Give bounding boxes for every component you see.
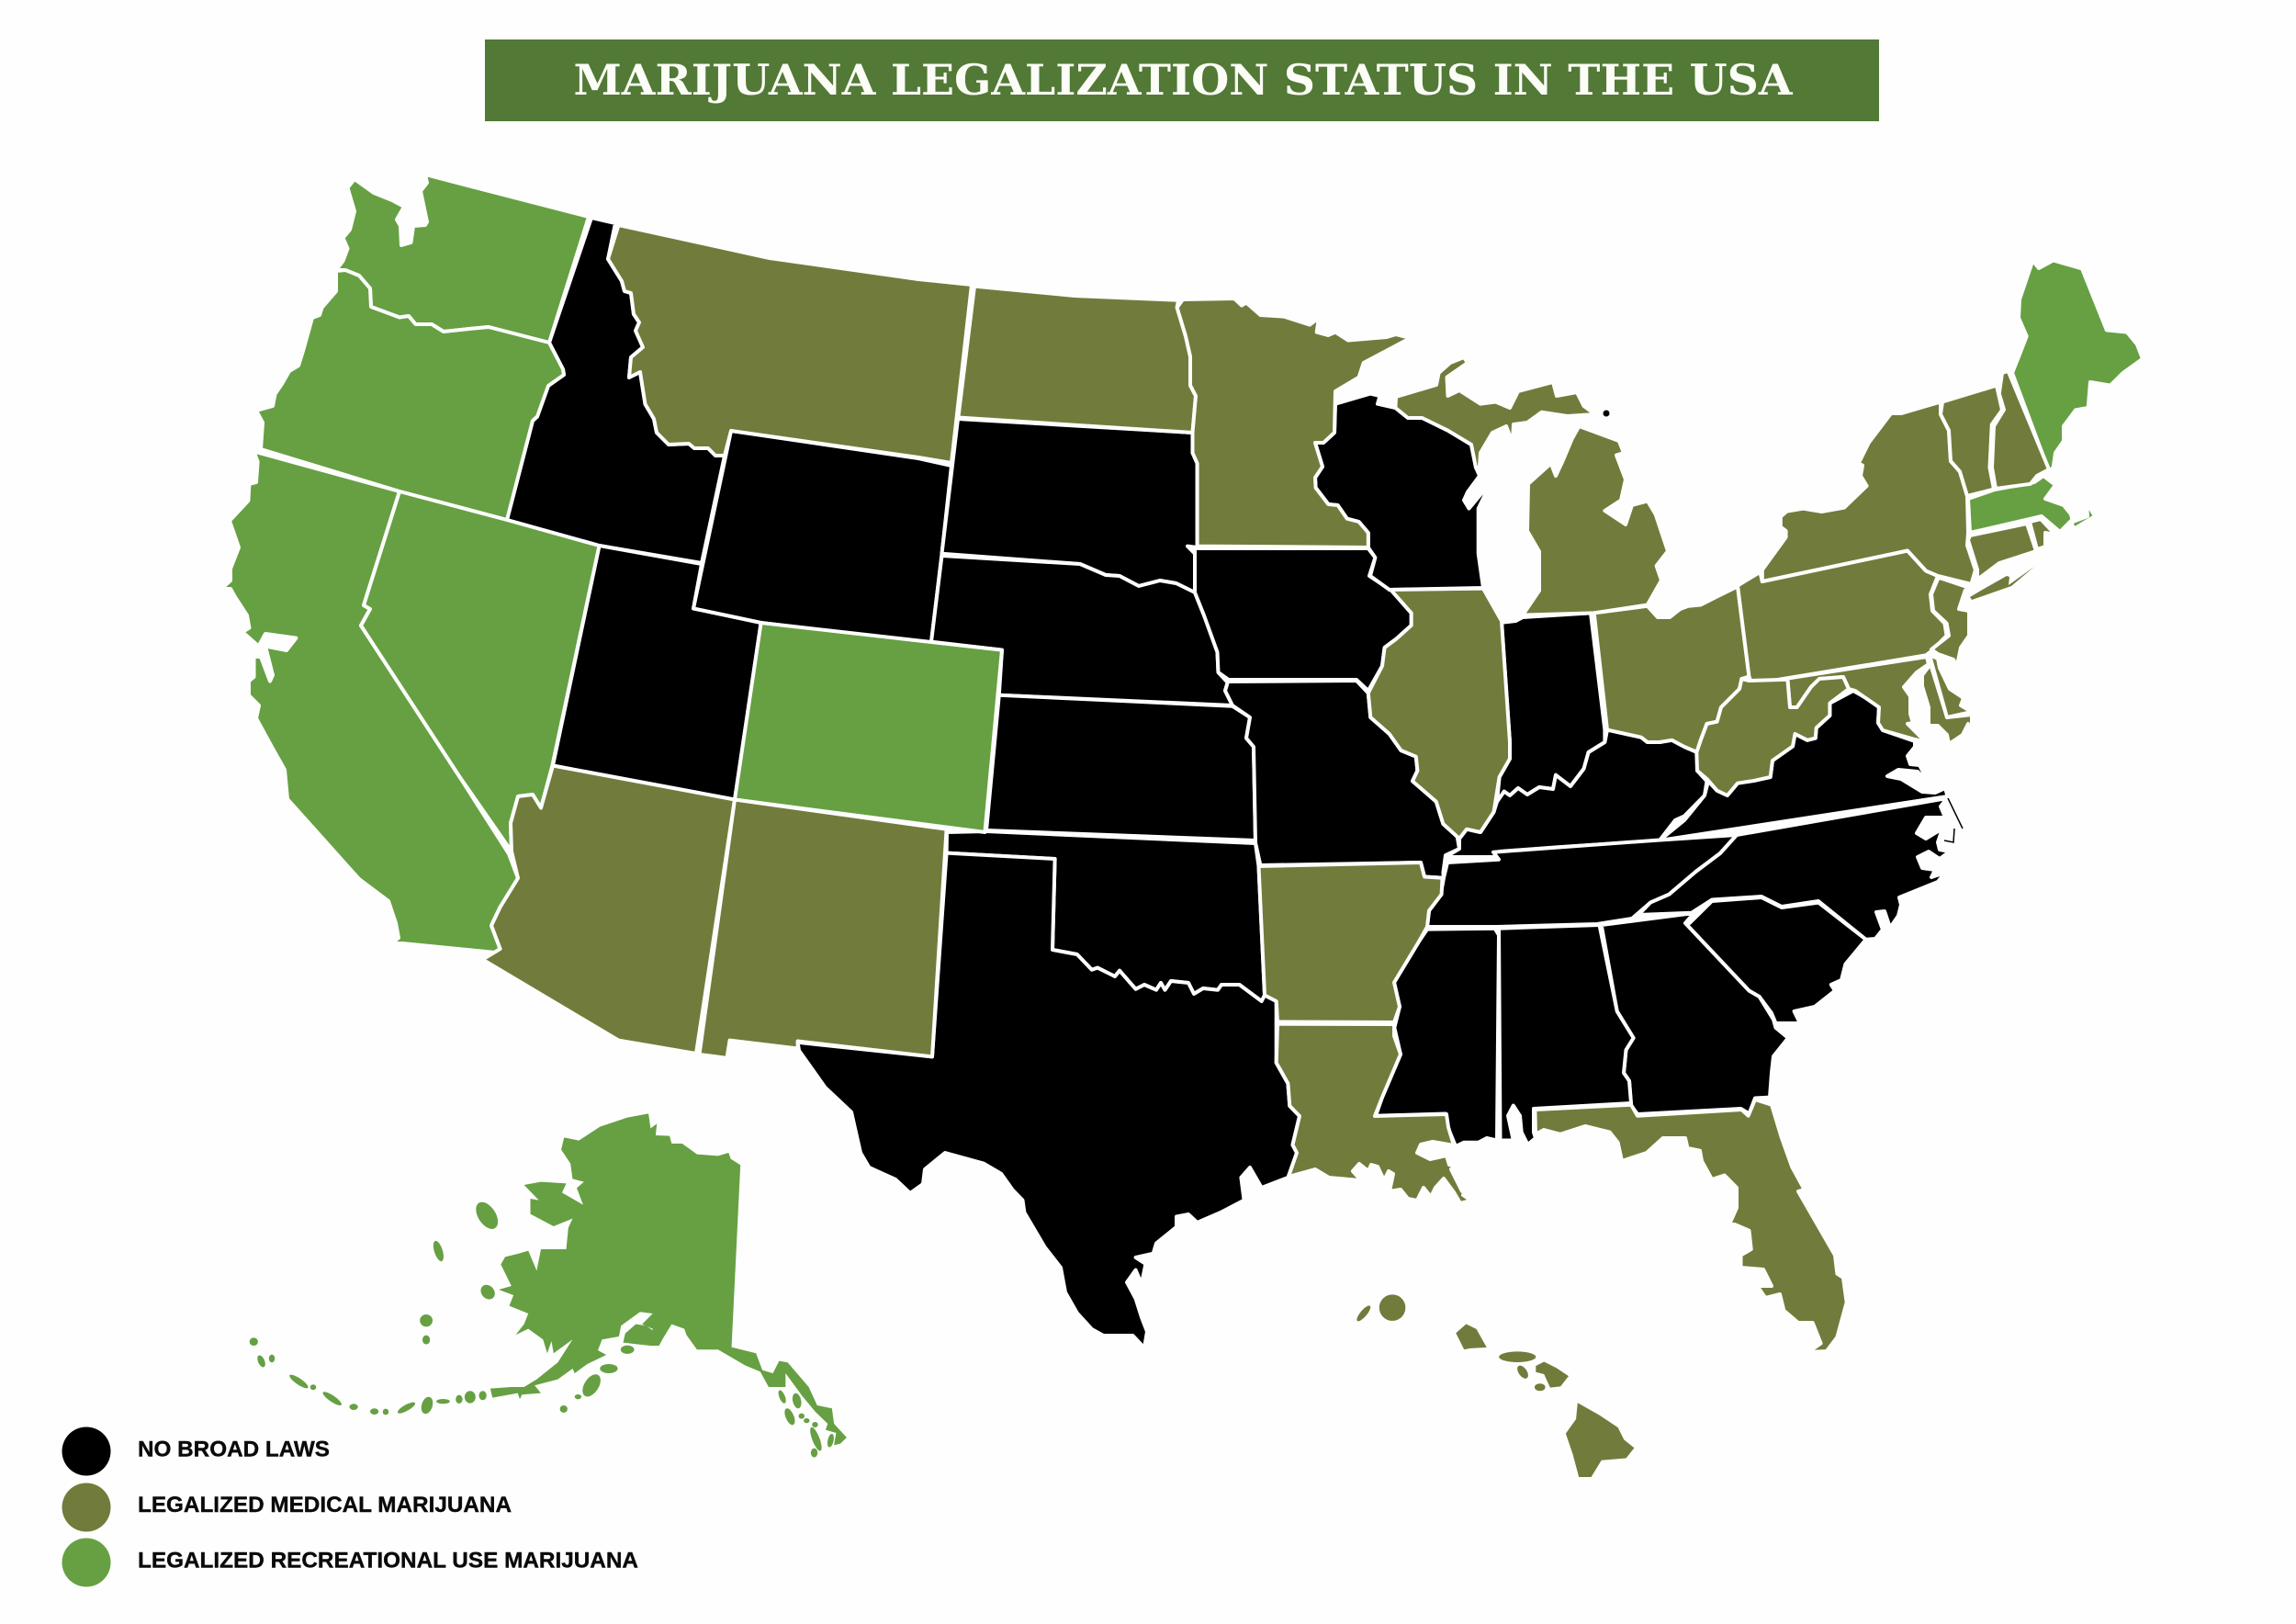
state: Ohio: [1594, 586, 1749, 752]
state: Oklahoma: [947, 831, 1265, 1001]
state: Vermont: [1941, 386, 2002, 496]
state: Wyoming: [693, 431, 951, 642]
title banner: MARIJUANA LEGALIZATION STATUS IN THE USA: [573, 55, 1794, 105]
state: Louisiana: [1277, 1024, 1472, 1203]
state: Maryland, eastern shore: [1922, 664, 1972, 744]
state: Mississippi: [1376, 929, 1499, 1146]
state: Missouri: [1225, 681, 1459, 878]
state: Alabama: [1499, 925, 1634, 1145]
state: Minnesota: [1177, 299, 1411, 547]
state: Washington: [336, 175, 589, 343]
state: New Jersey: [1931, 578, 1971, 666]
state: Montana: [608, 225, 972, 463]
Alaska islands: [250, 1200, 835, 1458]
state: Idaho: [507, 218, 725, 563]
state: Indiana: [1497, 613, 1604, 802]
state: Oregon: [256, 270, 564, 520]
state: Nevada: [361, 491, 599, 851]
state: Georgia: [1602, 914, 1788, 1114]
Isle Royale dot: [1604, 410, 1609, 417]
Hawaii: Niihau: [1355, 1303, 1372, 1323]
state: Alaska with islands: [250, 1113, 847, 1458]
state: Kentucky: [1446, 730, 1706, 857]
state: Iowa: [1195, 548, 1412, 691]
state: Florida: [1535, 1100, 1847, 1352]
state: Virginia: [1660, 691, 1948, 840]
state: North Carolina: [1638, 798, 1950, 940]
region: no broad laws states: [507, 218, 1963, 1348]
state: New York: [1762, 402, 1975, 584]
North Carolina outer banks: [1944, 798, 1963, 842]
state: Michigan lower peninsula: [1523, 426, 1668, 615]
state: California: [221, 452, 518, 953]
region: legalized medical states: [483, 225, 2055, 1352]
state: New Mexico: [700, 799, 947, 1058]
Hawaii: Big Island: [1566, 1403, 1634, 1477]
state: Delaware: [1930, 655, 1972, 717]
Hawaii: Lanai: [1515, 1364, 1530, 1381]
legend: [62, 1427, 638, 1587]
state: South Dakota: [942, 419, 1198, 592]
legend item: no broad laws: NO BROAD LAWS: [138, 1438, 330, 1462]
state: Connecticut: [1968, 524, 2036, 580]
legend item: legalized recreational use marijuana: LEGALIZED RECREATIONAL USE MARIJUANA: [138, 1549, 638, 1573]
Alaska mainland: [490, 1113, 847, 1445]
state: South Carolina: [1685, 897, 1866, 1023]
state: North Dakota: [958, 287, 1196, 433]
state: Hawaii: [1355, 1294, 1634, 1477]
legend item: legalized recreational use marijuana: [62, 1538, 638, 1587]
Hawaii: Kauai: [1379, 1294, 1405, 1321]
state: Nebraska: [931, 556, 1232, 705]
legend item: legalized medical marijuana: LEGALIZED MEDICAL MARIJUANA: [138, 1493, 512, 1517]
state: Arkansas: [1258, 863, 1442, 1022]
state: New Hampshire: [1992, 371, 2049, 489]
state: Illinois: [1368, 589, 1510, 839]
state: Arizona: [483, 766, 735, 1054]
state: Utah: [553, 546, 761, 799]
state: Kansas: [986, 695, 1255, 840]
Hawaii: Oahu: [1456, 1324, 1487, 1349]
map: contiguous United States: [221, 175, 2143, 1352]
Hawaii: Maui: [1536, 1362, 1569, 1388]
state: Wisconsin: [1315, 394, 1502, 590]
Hawaii: Molokai: [1499, 1351, 1536, 1362]
state: Michigan upper peninsula: [1395, 357, 1595, 468]
title banner: [485, 39, 1879, 121]
legend item: legalized medical marijuana: [62, 1483, 512, 1532]
state: Colorado: [735, 623, 1002, 832]
state: Maine: [2012, 261, 2143, 471]
state: Maryland, western shore: [1752, 657, 1929, 742]
state: New York, Long Island: [1970, 567, 2034, 600]
state: Texas: [798, 853, 1300, 1348]
state: West Virginia: [1696, 677, 1849, 795]
region: legalized recreational states: [221, 175, 2143, 953]
state: Pennsylvania: [1738, 551, 1947, 684]
state: Tennessee: [1427, 835, 1737, 927]
Hawaii: Kahoolawe: [1535, 1383, 1546, 1391]
state: Massachusetts: [1968, 476, 2095, 533]
state: Rhode Island: [2030, 519, 2055, 549]
legend item: no broad laws: [62, 1427, 330, 1475]
